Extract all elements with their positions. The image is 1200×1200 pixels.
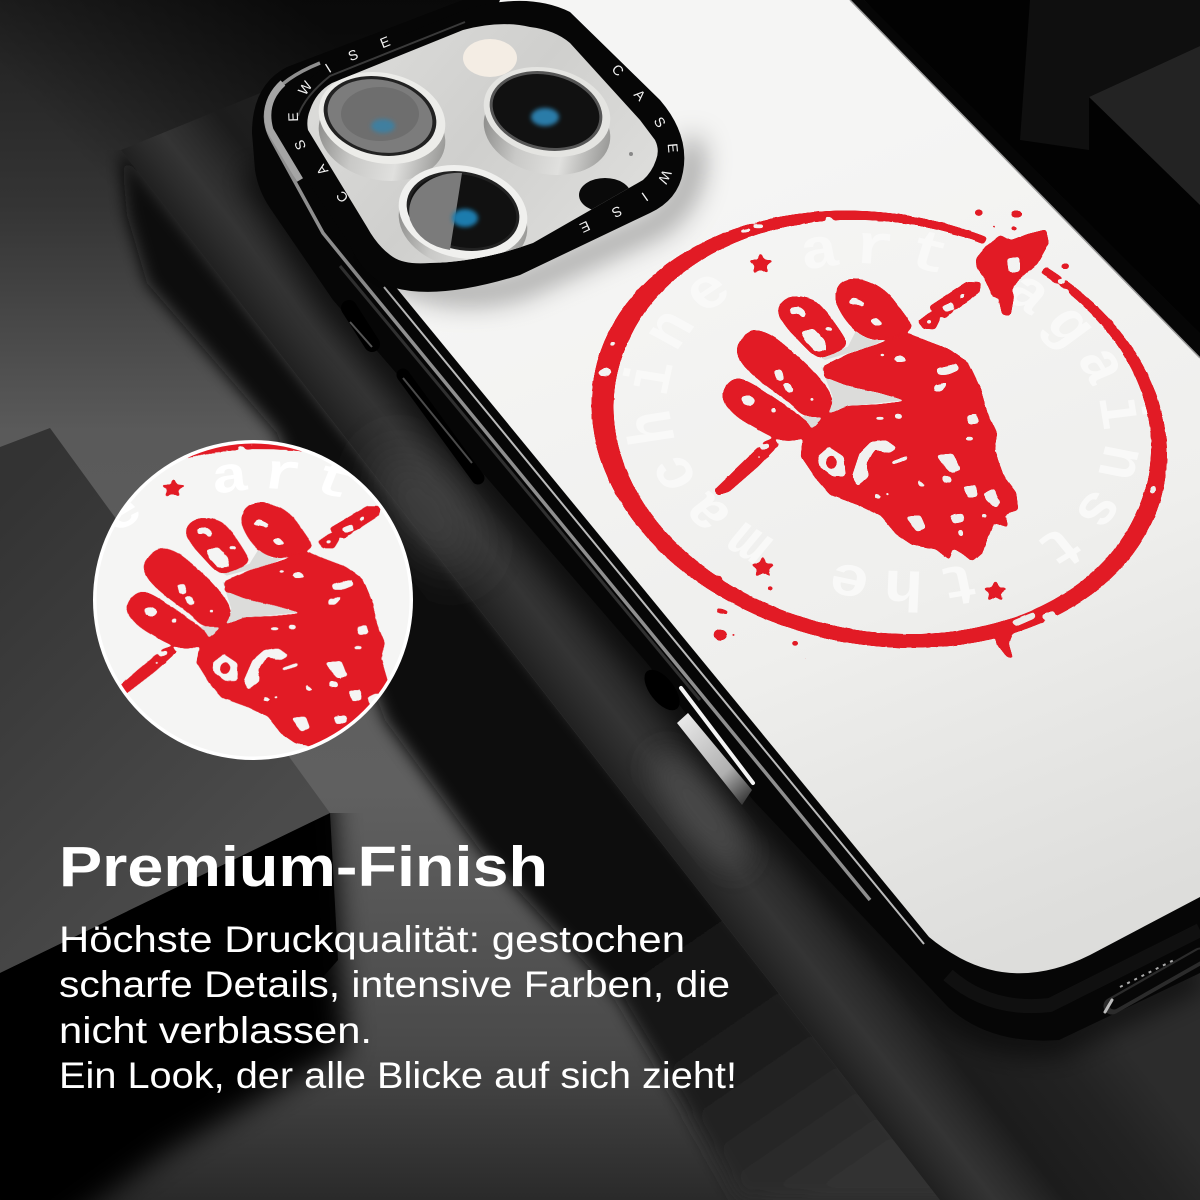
description text: Höchste Druckqualität: gestochen — [59, 919, 685, 960]
CASEWISE brand lettering: I — [639, 189, 651, 205]
camera window — [307, 24, 658, 263]
camera bump shadow — [360, 140, 692, 292]
lens two — [484, 67, 610, 175]
lens three — [398, 165, 528, 263]
large black box front face — [116, 155, 889, 1176]
flash — [463, 39, 517, 77]
upper right dark backdrop — [864, 0, 1200, 345]
white printed back — [390, 0, 1200, 973]
zoom detail circle — [93, 440, 413, 760]
lidar sensor — [579, 178, 629, 210]
volume button slot — [403, 375, 478, 478]
speaker slot — [1105, 955, 1200, 1012]
CASEWISE brand lettering: C — [609, 61, 627, 79]
bump black frame — [282, 1, 684, 292]
phone case black body — [252, 0, 1200, 1041]
mic dot — [629, 152, 633, 156]
description text: Ein Look, der alle Blicke auf sich zieht! — [59, 1055, 737, 1096]
logo ink: ring, fist, brush, stars — [592, 209, 1167, 660]
upper right box top face — [1089, 46, 1200, 205]
phone — [246, 0, 1200, 1058]
upper-right edge line — [850, 0, 1200, 358]
magnified logo: art against the machine — [115, 462, 347, 528]
CASEWISE brand lettering: S — [346, 46, 360, 64]
case lower rim — [948, 930, 1200, 1006]
CASEWISE brand lettering: E — [378, 33, 392, 51]
heading: Premium-Finish — [59, 835, 548, 899]
phone soft shadow — [255, 170, 1200, 1041]
bump gloss line — [298, 22, 465, 116]
power button silver — [638, 664, 753, 805]
CASEWISE brand lettering: E — [577, 218, 593, 236]
CASEWISE brand lettering — [285, 33, 681, 236]
CASEWISE brand lettering: W — [295, 77, 316, 98]
CASEWISE brand lettering: C — [333, 188, 351, 206]
CASEWISE brand lettering: S — [609, 203, 625, 221]
CASEWISE brand lettering: E — [285, 112, 301, 122]
description text — [59, 919, 737, 1096]
CASEWISE brand lettering: W — [655, 168, 675, 187]
printed art-against-the-machine logo — [591, 210, 1168, 659]
description text: nicht verblassen. — [59, 1010, 372, 1051]
lit patch beside phone button — [640, 741, 760, 879]
CASEWISE brand lettering: I — [322, 60, 334, 76]
lower-left box top face — [0, 428, 330, 973]
logo lettering on ring: art against the machine — [679, 326, 1148, 612]
lens one — [318, 72, 446, 181]
description text: scharfe Details, intensive Farben, die — [59, 964, 730, 1005]
silver edge highlights — [265, 63, 924, 944]
lower-left box front face — [0, 780, 348, 1200]
CASEWISE brand lettering: E — [665, 143, 681, 153]
CASEWISE brand lettering: S — [291, 138, 309, 152]
CASEWISE brand lettering: A — [312, 161, 331, 178]
lit patch on box top — [363, 440, 487, 580]
CASEWISE brand lettering: A — [631, 86, 649, 104]
side switch slot — [349, 308, 372, 347]
camera bump — [282, 1, 684, 292]
magnified logo — [115, 444, 388, 746]
CASEWISE brand lettering: S — [651, 114, 669, 130]
